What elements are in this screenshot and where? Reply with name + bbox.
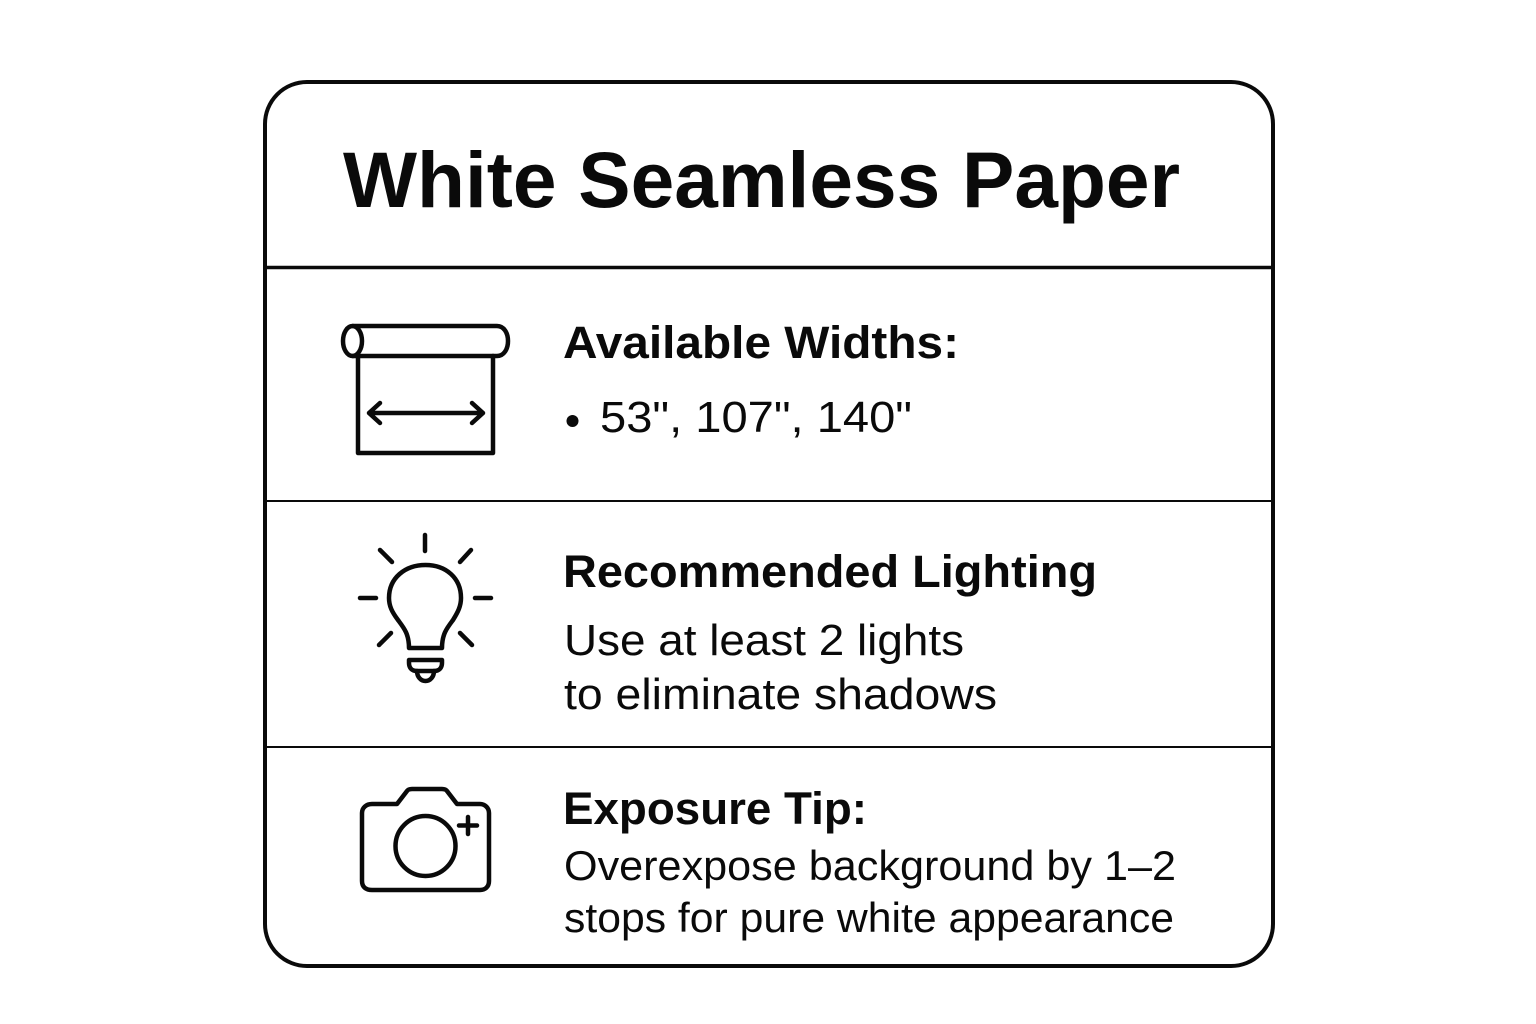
- heading: recommended lighting: Recommended Lighting: [563, 546, 1097, 597]
- text: lighting advice: Use at least 2 lights: [564, 616, 964, 665]
- row: exposure tip: [362, 783, 1176, 941]
- row: available widths: [343, 317, 959, 453]
- heading: exposure tip: Exposure Tip:: [563, 783, 867, 834]
- text: lighting advice: [564, 616, 997, 719]
- panel: white seamless paper card: [265, 82, 1273, 966]
- icon: light bulb: [360, 535, 491, 681]
- text: lighting advice: to eliminate shadows: [564, 670, 997, 719]
- text: exposure advice: stops for pure white appearance: [564, 894, 1174, 941]
- icon: camera with plus: [362, 789, 489, 890]
- text: exposure advice: [564, 842, 1176, 941]
- heading: available widths: Available Widths:: [563, 317, 959, 368]
- icon: paper roll with width arrow: [343, 326, 508, 453]
- text: exposure advice: Overexpose background by 1–2: [564, 842, 1176, 889]
- row: recommended lighting: [360, 535, 1097, 719]
- bullet list: widths: 53", 107", 140": [600, 393, 912, 442]
- title: White Seamless Paper: [343, 135, 1180, 224]
